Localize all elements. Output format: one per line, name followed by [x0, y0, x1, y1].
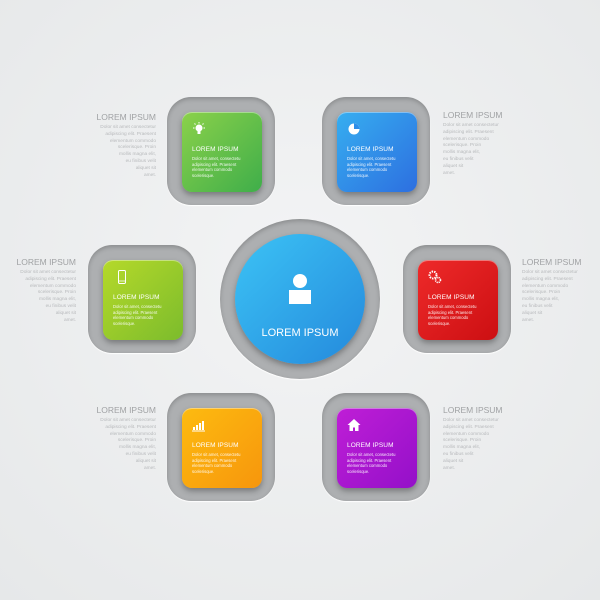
text: top-right: eu finibus velit — [443, 157, 473, 162]
panel: middle-right — [403, 245, 511, 353]
text: top-right: aliquet sit — [443, 164, 463, 169]
icon: bars — [192, 421, 205, 432]
card: blue chart: scelerisque. — [347, 173, 369, 178]
icon: house — [348, 419, 360, 431]
text: middle-left: eu finibus velit — [46, 304, 76, 309]
card: purple home — [337, 408, 417, 488]
text: bottom-left: adipiscing elit. Praesent — [105, 425, 156, 430]
text: top-left: elementum commodo — [110, 139, 156, 144]
center circle — [235, 234, 365, 364]
card: orange bars: LOREM IPSUM — [192, 442, 239, 449]
card: green idea: elementum commodo — [192, 167, 232, 172]
icon: phone — [118, 270, 126, 284]
card: lime mobile: adipiscing elit. Praesent — [113, 310, 157, 315]
text: middle-right: eu finibus velit — [522, 304, 552, 309]
text: middle-left: adipiscing elit. Praesent — [25, 277, 76, 282]
text: middle-left: elementum commodo — [30, 284, 76, 289]
card: green idea: scelerisque. — [192, 173, 214, 178]
card: lime mobile: scelerisque. — [113, 321, 135, 326]
icon: user — [289, 274, 311, 304]
text: middle-right: adipiscing elit. Praesent — [522, 277, 573, 282]
text: top-right: Dolor sit amet consectetur — [443, 123, 499, 128]
icon: bulb — [193, 122, 205, 134]
card: orange bars — [182, 408, 262, 488]
text: top-right: mollis magna elit, — [443, 150, 480, 155]
text: bottom-right: adipiscing elit. Praesent — [443, 425, 494, 430]
card: purple home: adipiscing elit. Praesent — [347, 458, 391, 463]
panel: top-left — [167, 97, 275, 205]
card: blue chart: elementum commodo — [347, 167, 387, 172]
text: top-right: LOREM IPSUM — [443, 110, 503, 120]
card: red gears: LOREM IPSUM — [428, 294, 475, 301]
card: lime mobile — [103, 260, 183, 340]
text: bottom-right: mollis magna elit, — [443, 445, 480, 450]
text: middle-right: Dolor sit amet consectetur — [522, 270, 578, 275]
text: middle-left: LOREM IPSUM — [16, 257, 76, 267]
text: top-right: scelerisque. Proin — [443, 143, 481, 148]
card: orange bars: scelerisque. — [192, 469, 214, 474]
text: bottom-right: amet. — [443, 466, 455, 471]
text: middle-left: Dolor sit amet consectetur — [20, 270, 76, 275]
card: purple home: scelerisque. — [347, 469, 369, 474]
text: middle-right — [522, 257, 582, 323]
card: red gears: scelerisque. — [428, 321, 450, 326]
card: green idea — [182, 112, 262, 192]
text: bottom-right — [443, 405, 503, 471]
text: top-left: mollis magna elit, — [119, 152, 156, 157]
card: blue chart: adipiscing elit. Praesent — [347, 162, 391, 167]
text: bottom-left — [96, 405, 156, 471]
text: middle-left: aliquet sit — [56, 311, 76, 316]
panel: bottom-left — [167, 393, 275, 501]
text: middle-left: amet. — [64, 318, 76, 323]
card: red gears: Dolor sit amet, consectetu — [428, 304, 476, 309]
text: top-left: aliquet sit — [136, 166, 156, 171]
card: red gears: adipiscing elit. Praesent — [428, 310, 472, 315]
icon: pie — [348, 124, 360, 134]
card: green idea: LOREM IPSUM — [192, 146, 239, 153]
text: middle-left: scelerisque. Proin — [38, 290, 76, 295]
text: bottom-right: Dolor sit amet consectetur — [443, 418, 499, 423]
card: green idea: Dolor sit amet, consectetu — [192, 156, 240, 161]
text: middle-right: aliquet sit — [522, 311, 542, 316]
card: blue chart: Dolor sit amet, consectetu — [347, 156, 395, 161]
text: top-right: elementum commodo — [443, 137, 489, 142]
card: purple home: LOREM IPSUM — [347, 442, 394, 449]
text: top-left: adipiscing elit. Praesent — [105, 132, 156, 137]
card: orange bars: Dolor sit amet, consectetu — [192, 452, 240, 457]
text: top-right — [443, 110, 503, 176]
text: bottom-left: mollis magna elit, — [119, 445, 156, 450]
text: top-right: adipiscing elit. Praesent — [443, 130, 494, 135]
card: orange bars: adipiscing elit. Praesent — [192, 458, 236, 463]
text: bottom-left: aliquet sit — [136, 459, 156, 464]
card: purple home: Dolor sit amet, consectetu — [347, 452, 395, 457]
card: blue chart — [337, 112, 417, 192]
panel: top-right — [322, 97, 430, 205]
text: top-left: scelerisque. Proin — [118, 145, 156, 150]
card: lime mobile: elementum commodo — [113, 315, 153, 320]
text: bottom-right: scelerisque. Proin — [443, 438, 481, 443]
text: bottom-right: LOREM IPSUM — [443, 405, 503, 415]
text: middle-right: LOREM IPSUM — [522, 257, 582, 267]
text: bottom-left: scelerisque. Proin — [118, 438, 156, 443]
text: middle-right: mollis magna elit, — [522, 297, 559, 302]
text: bottom-left: amet. — [144, 466, 156, 471]
text: bottom-left: eu finibus velit — [126, 452, 156, 457]
text: middle-left: mollis magna elit, — [39, 297, 76, 302]
text: bottom-right: aliquet sit — [443, 459, 463, 464]
card: red gears: elementum commodo — [428, 315, 468, 320]
card: lime mobile: LOREM IPSUM — [113, 294, 160, 301]
text: top-left: LOREM IPSUM — [96, 112, 156, 122]
text: middle-right: elementum commodo — [522, 284, 568, 289]
card: purple home: elementum commodo — [347, 463, 387, 468]
card: green idea: adipiscing elit. Praesent — [192, 162, 236, 167]
card: orange bars: elementum commodo — [192, 463, 232, 468]
center label: LOREM IPSUM — [261, 327, 338, 339]
card: red gears — [418, 260, 498, 340]
card: lime mobile: Dolor sit amet, consectetu — [113, 304, 161, 309]
text: bottom-left: elementum commodo — [110, 432, 156, 437]
panel: bottom-right — [322, 393, 430, 501]
text: top-left — [96, 112, 156, 178]
panel: middle-left — [88, 245, 196, 353]
icon: gears — [428, 270, 442, 284]
text: bottom-left: Dolor sit amet consectetur — [100, 418, 156, 423]
center ring — [220, 219, 380, 379]
card: blue chart: LOREM IPSUM — [347, 146, 394, 153]
text: bottom-right: eu finibus velit — [443, 452, 473, 457]
text: top-left: amet. — [144, 173, 156, 178]
text: bottom-left: LOREM IPSUM — [96, 405, 156, 415]
text: middle-right: scelerisque. Proin — [522, 290, 560, 295]
text: middle-right: amet. — [522, 318, 534, 323]
text: top-left: eu finibus velit — [126, 159, 156, 164]
text: top-right: amet. — [443, 171, 455, 176]
text: middle-left — [16, 257, 76, 323]
text: top-left: Dolor sit amet consectetur — [100, 125, 156, 130]
text: bottom-right: elementum commodo — [443, 432, 489, 437]
